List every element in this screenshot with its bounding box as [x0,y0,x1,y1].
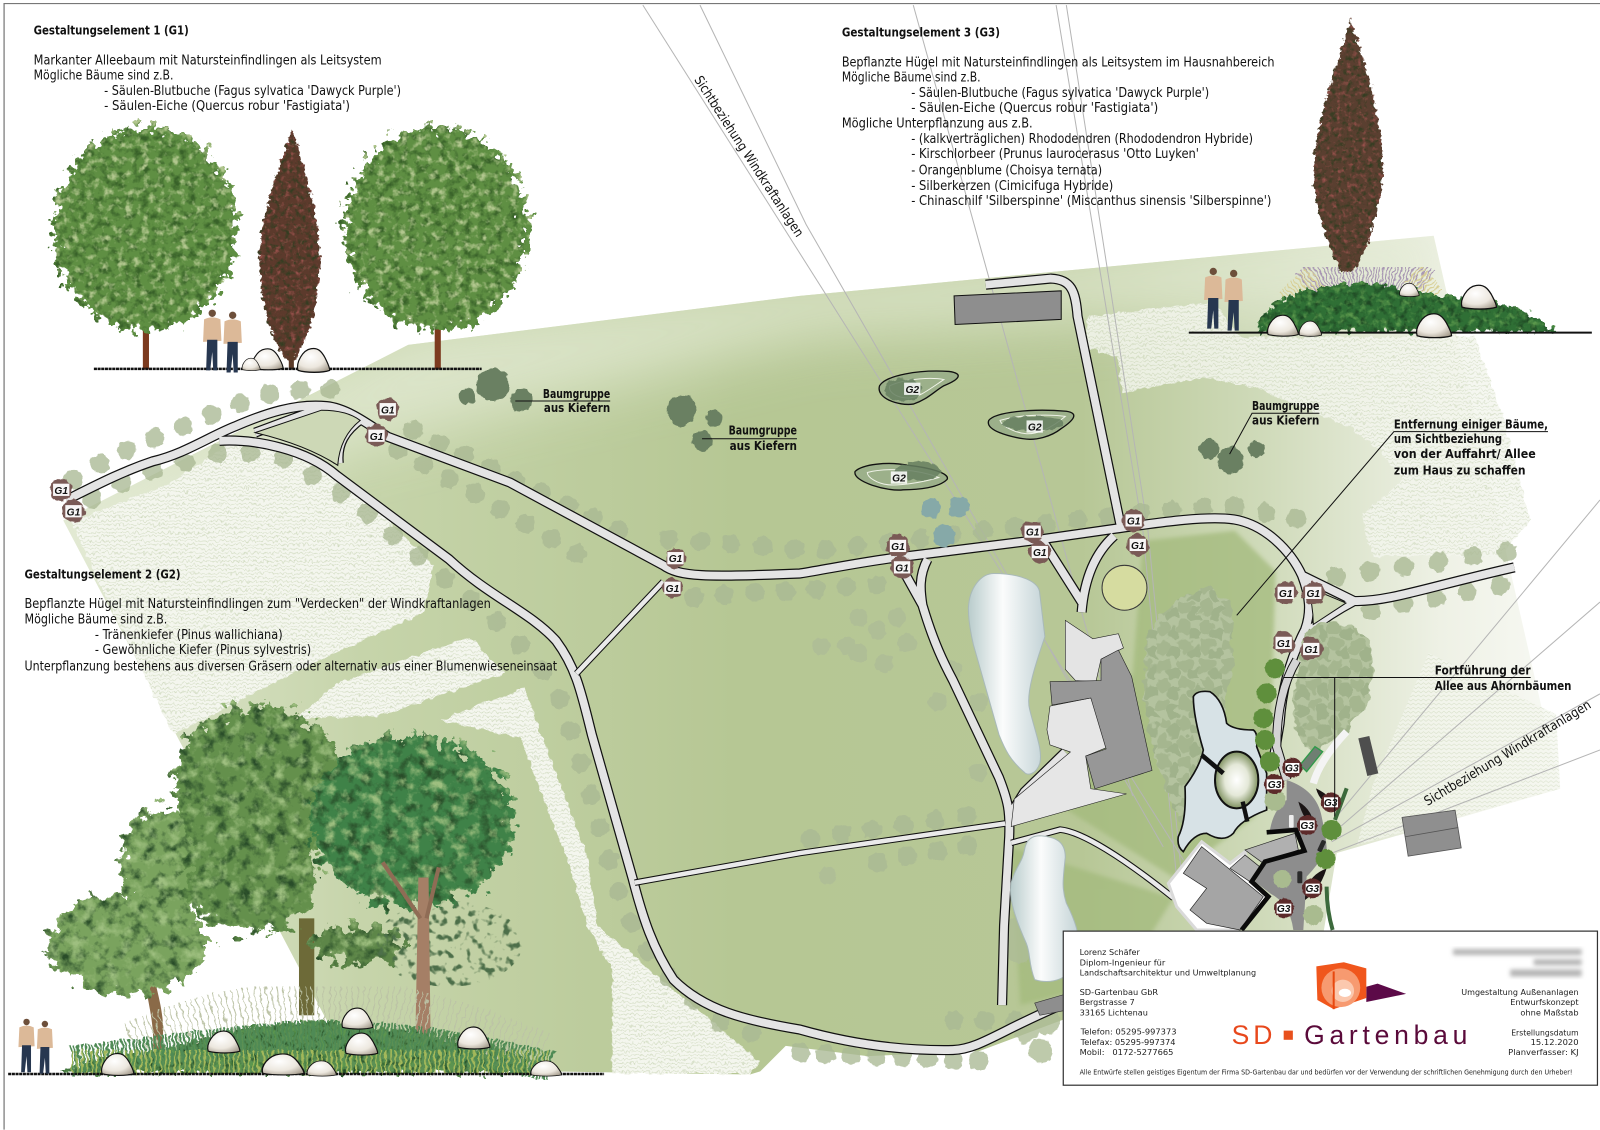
G1 tags: G1 [891,542,905,553]
columnar tree [1313,18,1383,273]
address block: Lorenz Schäfer [1080,947,1140,957]
lawn shading [41,219,1449,1005]
logo wordmark: SD [1232,1020,1272,1050]
small trees [1264,789,1323,925]
G1 tags: G1 [370,432,384,443]
allee tree rows [73,389,1509,1061]
G2 tags [891,383,1043,485]
annotation: tree removal: um Sichtbeziehung [1394,432,1502,447]
residential building [1011,620,1152,827]
annotation: pines 3: Baumgruppe [1252,399,1320,414]
annotation: pines 1: aus Kiefern [544,401,610,416]
G2 tags: G2 [892,474,906,485]
text: G2 description: Unterpflanzung bestehens aus diversen Gräsern oder alternativ aus einer Blumenwieseneinsaat [24,659,557,674]
drive [1277,660,1297,780]
triangle islands [255,410,1346,624]
text: G3 description [842,26,1274,209]
planter circle [1102,565,1147,610]
main house [1183,847,1263,930]
person [1204,268,1222,329]
text: G2 description: Bepflanzte Hügel mit Natursteinfindlingen zum "Verdecken" der Windkraftanlagen [24,597,491,612]
annotation: tree removal: Entfernung einiger Bäume, [1394,418,1548,433]
text: G3 description: Gestaltungselement 3 (G3) [842,26,1000,41]
G1 tags: G1 [67,507,81,518]
sparse needles [376,901,522,987]
annotation: tree removal: von der Auffahrt/ Allee [1394,447,1536,462]
text: G1 description: Gestaltungselement 1 (G1) [34,24,189,39]
barn right [1402,810,1461,856]
G1 tags: G1 [381,405,395,416]
logo wordmark: Gartenbau [1304,1020,1467,1050]
label: sight line north: Sichtbeziehung Windkraftanlagen [691,74,806,240]
boulders [1268,283,1496,338]
stem [289,352,294,369]
logo wordmark [1232,1020,1467,1050]
text: G3 description: - Kirschlorbeer (Prunus laurocerasus 'Otto Luyken' [911,147,1199,162]
address block: Diplom-Ingenieur für [1080,957,1166,967]
G1 tags: G1 [1306,589,1320,600]
blurred client address [1453,949,1582,977]
meadow hatch lower strip [439,688,760,1073]
annotation: pines 3 [1230,399,1320,454]
crown left [53,127,237,331]
annotation: allee continuation: Fortführung der [1435,663,1531,678]
logo cube [1316,962,1406,1009]
grasses [1288,273,1434,302]
annotation: allee continuation [1284,663,1571,816]
boulders [242,348,330,372]
courtyard detail [1168,658,1378,930]
G3 labels: G3 [1268,780,1282,791]
lawn [63,236,1560,1074]
text: G3 description: - Silberkerzen (Cimicifuga Hybride) [911,179,1113,194]
project block: Erstellungsdatum [1511,1028,1579,1038]
ground line [8,1073,604,1075]
trunk left [143,306,149,369]
person [203,310,221,370]
G1 tags: G1 [895,563,909,574]
tree mass right of allee [1293,622,1373,750]
text: G1 description [34,24,401,114]
meadow hatch upper right [1087,302,1531,556]
text: G3 description: - Säulen-Blutbuche (Fagus sylvatica 'Dawyck Purple') [911,86,1209,101]
text: G3 description: - (kalkverträglichen) Rhododendren (Rhododendron Hybride) [911,132,1253,147]
grasses [71,1000,551,1066]
tree mass left of pond [1144,587,1233,821]
text: G3 description: Bepflanzte Hügel mit Natursteinfindlingen als Leitsystem im Hausnahbereich [842,55,1274,70]
text: G2 description: - Tränenkiefer (Pinus wallichiana) [95,628,283,643]
project block: Entwurfskonzept [1510,997,1579,1007]
G1 tags: G1 [1127,516,1141,527]
G1 tags [50,398,1324,660]
person [223,312,242,372]
trunk right [435,306,441,369]
panel: title block [1063,931,1597,1085]
shrubs [1256,283,1555,332]
G2 hills [855,371,1074,490]
text: G3 description: Mögliche Unterpflanzung aus z.B. [842,117,1033,132]
person [1224,270,1243,331]
dark shed [1358,736,1378,776]
text: G3 description: - Chinaschilf 'Silberspinne' (Miscanthus sinensis 'Silberspinne') [911,194,1271,209]
G2 tags: G2 [1028,423,1042,434]
text: G2 description: - Gewöhnliche Kiefer (Pinus sylvestris) [95,643,311,658]
project block: 15.12.2020 [1531,1037,1579,1047]
tags G3 [1264,758,1341,918]
G1 tags: G1 [669,554,683,565]
trunk 1 [144,949,163,1051]
address block: 33165 Lichtenau [1080,1007,1148,1017]
house plot [1168,842,1268,930]
crown middle [173,706,347,934]
sight lines [643,5,1600,898]
small building bottom [1035,994,1066,1015]
G3 labels: G3 [1285,763,1299,774]
address block: Bergstrasse 7 [1080,997,1135,1007]
G1 tags: G1 [1131,541,1145,552]
annotation: allee continuation: Allee aus Ahornbäumen [1435,679,1571,694]
annotation: pines 1: Baumgruppe [543,387,610,402]
G3 labels: G3 [1324,798,1338,809]
G3 labels: G3 [1277,904,1291,915]
address block: Landschaftsarchitektur und Umweltplanung [1080,968,1256,978]
G1 tags: G1 [1033,548,1047,559]
text: G2 description: Gestaltungselement 2 (G2) [24,568,181,583]
project block: ohne Maßstab [1520,1007,1579,1017]
blue trees [920,497,969,547]
ground line [94,368,482,370]
text: G1 description: Mögliche Bäume sind z.B. [34,69,173,84]
G2 tags: G2 [905,385,919,396]
annotation: pines 2: aus Kiefern [730,439,797,454]
project block: Umgestaltung Außenanlagen [1461,987,1579,997]
ponds [968,573,1079,981]
allee maple trees [1253,658,1342,869]
G3 labels: G3 [1305,884,1319,895]
trunk 3 [415,878,431,1041]
roads [66,279,1514,1050]
illustration: G1 [53,127,529,372]
text: G3 description: - Säulen-Eiche (Quercus robur 'Fastigiata') [911,101,1158,116]
beds [1298,788,1337,900]
scattered field trees [811,608,1060,1063]
ground line [1189,332,1592,334]
tree groups: pines [459,368,1264,473]
forecourt [1255,780,1327,930]
annotation: tree removal [1237,418,1548,615]
text: G1 description: - Säulen-Blutbuche (Fagus sylvatica 'Dawyck Purple') [104,84,401,99]
person [18,1019,35,1072]
card [1063,931,1597,1085]
address block: SD-Gartenbau GbR [1080,987,1158,997]
crown left [48,808,207,995]
address block: Mobil: 0172-5277665 [1080,1047,1173,1057]
text: G1 description: - Säulen-Eiche (Quercus robur 'Fastigiata') [104,99,350,114]
annotation: pines 1 [515,387,610,416]
text: G2 description [24,568,557,674]
annotation: tree removal: zum Haus zu schaffen [1394,463,1526,478]
G1 tags: G1 [54,486,68,497]
lower branch [308,926,406,962]
carport [1300,747,1323,772]
G3 labels [1268,763,1338,915]
annotation: pines 2: Baumgruppe [729,424,797,439]
annotation: pines 2 [702,424,797,454]
G1 tags: G1 [1304,645,1318,656]
pond with island [1178,691,1267,852]
boulders [102,1008,562,1076]
project block [1461,987,1579,1057]
trunk 2 [299,918,314,1015]
island [1215,752,1258,808]
label: sight line east: Sichtbeziehung Windkraftanlagen [1422,698,1594,810]
person [37,1021,53,1074]
text: G1 description: Markanter Alleebaum mit Natursteinfindlingen als Leitsystem [34,53,382,68]
illustration: G3 [1189,18,1592,338]
G3 labels: G3 [1300,821,1314,832]
address block [1080,947,1256,1057]
illustration: G2 [8,706,604,1076]
address block: Telefon: 05295-997373 [1080,1027,1177,1037]
meadow hatch left [71,444,434,735]
project block: Planverfasser: KJ [1508,1047,1579,1057]
text: G2 description: Mögliche Bäume sind z.B. [24,612,167,627]
G1 tags: G1 [1279,589,1293,600]
hedge [1327,788,1347,930]
columnar beech [259,129,320,359]
text: G3 description: - Orangenblume (Choisya ternata) [911,163,1102,178]
text: G3 description: Mögliche Bäume sind z.B. [842,71,981,86]
annotation: pines 3: aus Kiefern [1252,413,1319,428]
driveway [1313,732,1347,783]
address block: Telefax: 05295-997374 [1080,1037,1176,1047]
bridges [1202,755,1247,822]
meadow hatch lower right [1357,653,1560,845]
crown front [309,736,513,907]
wing [1230,833,1298,882]
meadow hatch middle strip [296,637,505,718]
G1 tags: G1 [1277,639,1291,650]
barn top [954,291,1061,324]
branches [383,862,439,918]
G1 tags: G1 [1026,528,1040,539]
crown right [345,127,529,331]
G1 tags: G1 [666,584,680,595]
cars [1289,815,1326,883]
thick walls [1242,830,1304,930]
undergrowth [63,1021,556,1073]
